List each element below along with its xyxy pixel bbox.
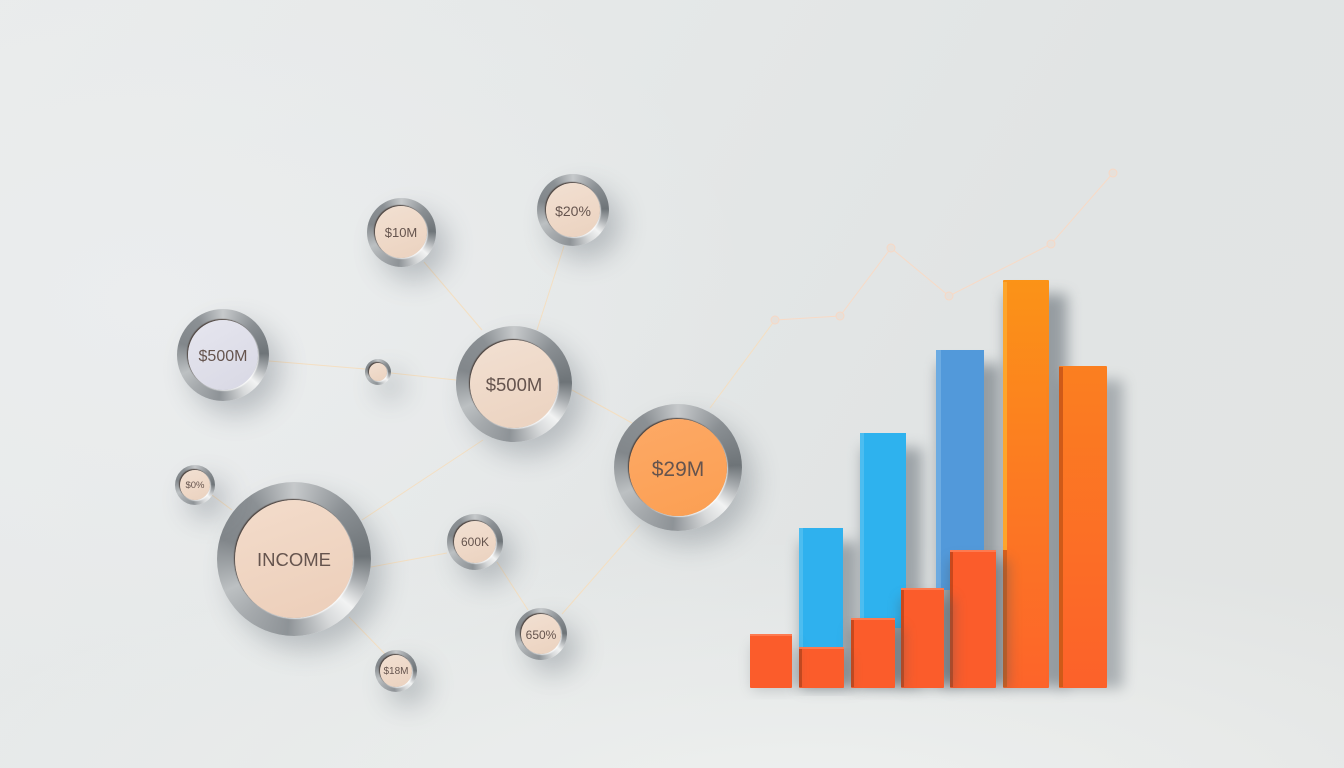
node: $18M: $18M [383,666,408,676]
node: $500M [456,326,572,442]
node: $29M [614,404,742,531]
bar: orange right [1059,366,1123,688]
node: 650% [515,608,567,660]
node: $500M: $500M [486,374,542,395]
bar: blue 1 [799,528,858,688]
node: 650%: 650% [526,628,556,642]
bar: red 5 [950,550,1008,688]
node: 600K [447,514,503,570]
node: $10M [366,198,436,266]
node: INCOME [217,482,371,636]
node: INCOME: INCOME [257,549,331,570]
node: $0% [175,465,215,505]
bar: blue 2 [860,433,922,686]
node: $20%: $20% [555,203,591,219]
node: $20% [537,174,609,246]
bar: blue 3 [936,350,1000,684]
node: $29M: $29M [652,458,704,481]
bar: red 4 [901,588,953,688]
node: $500M lavender [177,309,269,401]
bar: tall orange [1003,280,1067,688]
node: 600K: 600K [461,535,489,549]
node: $0%: $0% [185,480,204,490]
bar: red 1 [750,634,796,690]
bar: red 2 [799,647,849,689]
node: $10M: $10M [385,224,417,240]
node: small dot [365,359,391,385]
node: $18M [375,650,417,692]
node: $500M lavender: $500M [199,348,247,365]
bar: red 3 [851,618,903,688]
